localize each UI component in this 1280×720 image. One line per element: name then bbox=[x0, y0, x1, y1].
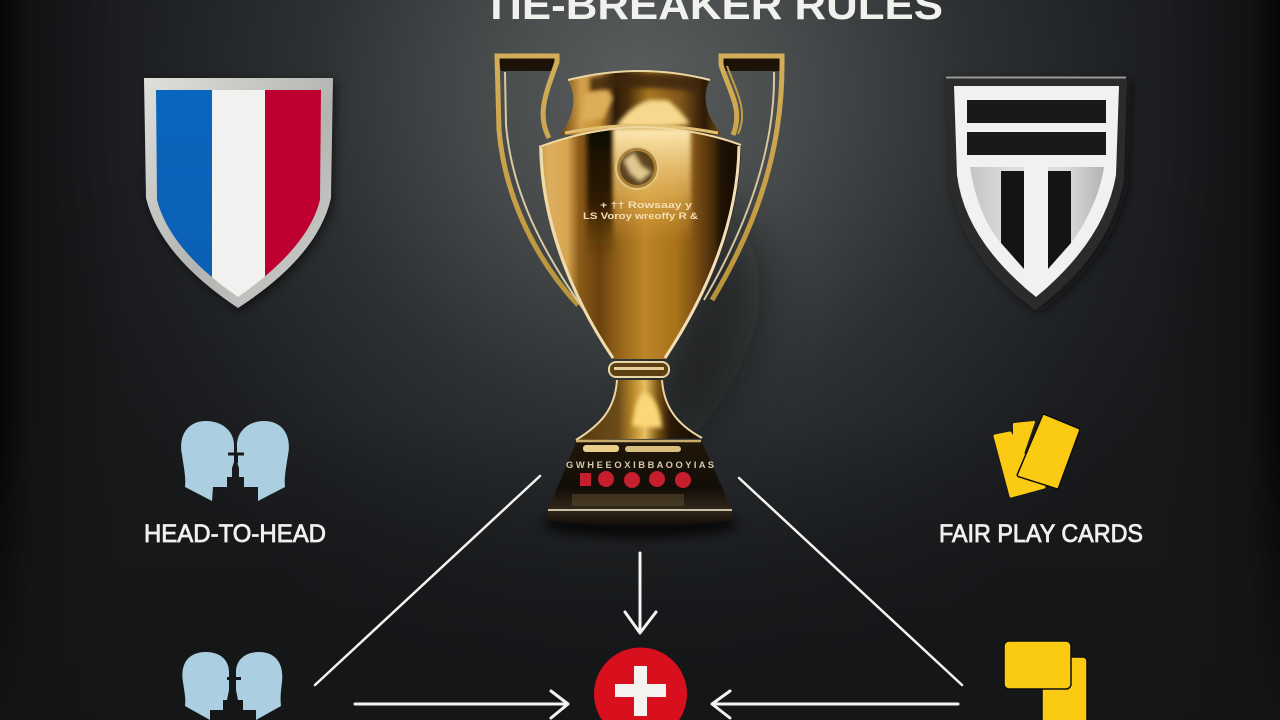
trophy base: G W H E E O X I B B A O O Y I A S bbox=[566, 460, 714, 470]
trophy shadow bbox=[650, 200, 760, 430]
trophy engraving bbox=[583, 200, 699, 221]
label: fair play cards: FAIR PLAY CARDS bbox=[939, 520, 1143, 548]
trophy handles bbox=[497, 56, 782, 310]
arrow: from trophy down bbox=[625, 553, 656, 633]
trophy engraving: + †† Rowsaay y bbox=[600, 200, 692, 210]
icon: yellow cards fan bbox=[995, 416, 1078, 496]
trophy stem bbox=[576, 380, 702, 440]
trophy cup bbox=[539, 127, 741, 359]
shield: black and white stripes bbox=[945, 77, 1131, 313]
trophy collar bbox=[609, 362, 669, 377]
label: head-to-head: HEAD-TO-HEAD bbox=[144, 520, 326, 548]
icon: yellow cards lower bbox=[1004, 641, 1087, 720]
arrow: from right bbox=[712, 691, 958, 718]
icon: head-to-head lower bbox=[182, 652, 282, 720]
icon: red circle with white cross bbox=[594, 648, 687, 720]
icon: head-to-head bbox=[181, 421, 289, 501]
arrow: left diagonal bbox=[315, 476, 540, 685]
trophy bbox=[497, 56, 782, 538]
arrows into tie-breaker bbox=[315, 476, 962, 718]
trophy neck bbox=[560, 70, 722, 135]
trophy base bbox=[542, 440, 738, 538]
trophy engraving: LS Voroy wreoffy R & bbox=[583, 211, 699, 221]
arrow: right diagonal bbox=[739, 478, 962, 685]
arrow: from left bbox=[355, 691, 568, 718]
trophy emblem bbox=[616, 147, 658, 189]
shield: French tricolour bbox=[144, 78, 336, 311]
